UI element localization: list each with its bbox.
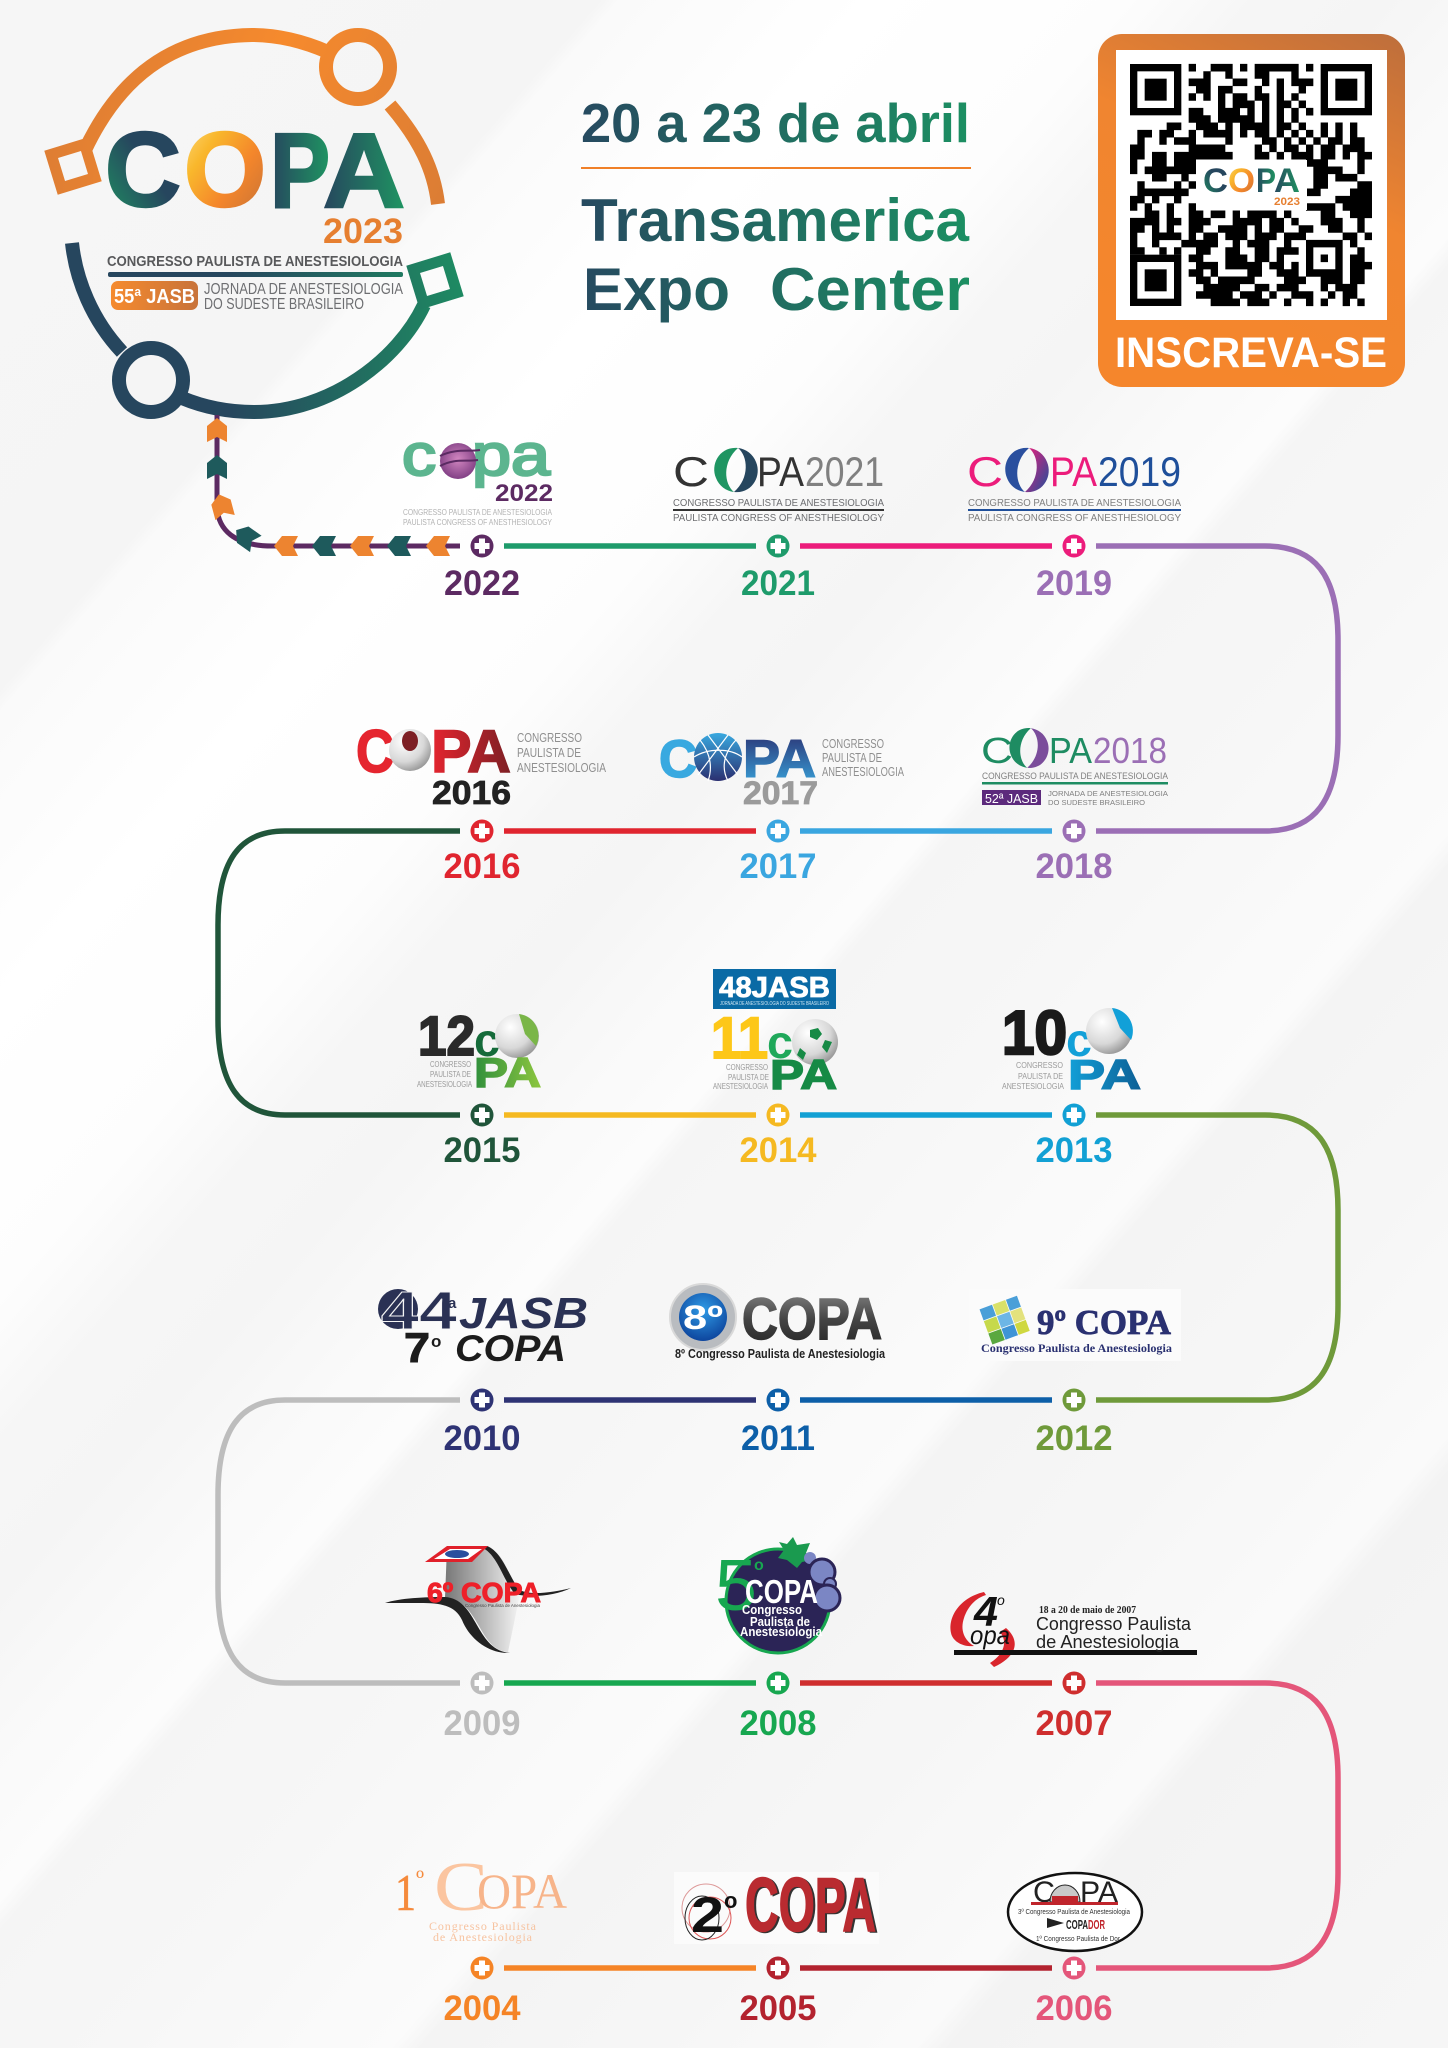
node 2007	[1062, 1672, 1086, 1694]
logo 1o COPA: C	[434, 1849, 488, 1926]
logo 3o COPA and COPADOR	[1008, 1873, 1142, 1951]
lead-in arrow path from logo to 2022	[207, 415, 460, 556]
logo 5o COPA	[715, 1537, 840, 1653]
logo 3o COPA and COPADOR: C	[1033, 1876, 1055, 1909]
main logo: COPA 2023	[51, 35, 457, 412]
QR centre logo: C	[1203, 162, 1228, 200]
year 2007: 2007	[1036, 1704, 1112, 1743]
logo 2021: PA	[757, 448, 804, 495]
wordmark COPA	[105, 111, 405, 230]
year 2011: 2011	[741, 1419, 815, 1458]
logo 2019: C	[967, 448, 1003, 495]
congress name: CONGRESSO PAULISTA DE ANESTESIOLOGIA	[107, 254, 403, 270]
logo 1o COPA: Congresso Paulista	[429, 1919, 537, 1933]
logo 8o COPA: COPA	[742, 1287, 882, 1352]
logo 2022: PAULISTA CONGRESS OF ANESTHESIOLOGY	[403, 518, 553, 527]
logo 2016: PAULISTA DE	[517, 745, 581, 760]
logo 4o copa	[950, 1588, 1197, 1667]
milestone 2019	[967, 448, 1181, 603]
year 2008: 2008	[740, 1704, 816, 1743]
logo 2016: C	[356, 718, 394, 785]
logo 2018: PA	[1049, 730, 1092, 771]
logo 2o COPA: o	[724, 1888, 737, 1913]
logo 2021: CONGRESSO PAULISTA DE ANESTESIOLOGIA	[673, 497, 884, 509]
QR centre logo: A	[1274, 162, 1300, 200]
logo 10 COPA: ANESTESIOLOGIA	[1002, 1082, 1065, 1091]
logo 1o COPA: OPA	[477, 1863, 567, 1919]
logo 44a JASB 7o COPA: JASB	[459, 1289, 588, 1338]
logo 8o COPA	[670, 1284, 886, 1361]
logo 2017: 2017	[743, 775, 818, 811]
logo 11 COPA: c	[767, 1016, 793, 1068]
bar	[108, 272, 403, 277]
node 2014	[766, 1104, 790, 1126]
logo 2021: 2021	[805, 448, 884, 495]
logo 2017: PA	[743, 730, 816, 789]
logo 2022: c	[402, 423, 436, 488]
logo 2016: 2016	[432, 774, 511, 811]
logo 12 COPA: CONGRESSO	[430, 1060, 471, 1069]
milestone 2009	[385, 1546, 571, 1743]
logo 4o copa: de Anestesiologia	[1036, 1632, 1180, 1652]
logo 2o COPA: 2	[691, 1887, 724, 1943]
milestone 2021	[673, 448, 884, 603]
JASB description: JORNADA DE ANESTESIOLOGIA	[204, 281, 404, 298]
logo 10 COPA: 10	[1002, 999, 1067, 1068]
node 2010	[470, 1388, 494, 1412]
logo 2018: DO SUDESTE BRASILEIRO	[1048, 798, 1145, 807]
year 2009: 2009	[444, 1704, 520, 1743]
logo 1o COPA: º	[416, 1865, 424, 1894]
year 2013: 2013	[1036, 1131, 1112, 1170]
year 2018: 2018	[1036, 847, 1112, 886]
logo 4o copa: opa	[970, 1620, 1010, 1650]
node 2022	[470, 534, 494, 558]
logo 10 COPA	[1002, 999, 1141, 1098]
node 2009	[470, 1672, 494, 1694]
QR centre logo: P	[1256, 162, 1276, 200]
node 2011	[766, 1388, 790, 1412]
logo 2018: JORNADA DE ANESTESIOLOGIA	[1048, 789, 1168, 798]
logo 2022: CONGRESSO PAULISTA DE ANESTESIOLOGIA	[403, 508, 553, 517]
logo 2018: 2018	[1093, 730, 1167, 771]
logo 44a JASB 7o COPA: o	[431, 1332, 441, 1351]
node 2019	[1062, 534, 1086, 558]
logo 12 COPA	[417, 1004, 541, 1096]
QR centre logo	[1197, 160, 1307, 210]
logo 2o COPA	[674, 1863, 879, 1948]
node 2016	[470, 820, 494, 842]
date divider	[581, 167, 971, 169]
logo 2016: PA	[431, 718, 511, 785]
logo 2019	[967, 448, 1181, 524]
logo 9o COPA: 9º COPA	[1037, 1303, 1172, 1342]
year 2004: 2004	[444, 1989, 521, 2028]
logo 11 COPA: PAULISTA DE	[728, 1073, 769, 1082]
wordmark COPA: O	[184, 111, 266, 229]
logo 2016	[356, 718, 606, 811]
logo 10 COPA: PAULISTA DE	[1018, 1072, 1063, 1081]
logo 3o COPA and COPADOR: 1º Congresso Paulista de Dor	[1036, 1936, 1121, 1943]
logo 2018: CONGRESSO PAULISTA DE ANESTESIOLOGIA	[982, 771, 1169, 782]
year 2017: 2017	[740, 847, 816, 886]
logo 3o COPA and COPADOR: COPA	[1066, 1917, 1088, 1932]
node 2015	[470, 1104, 494, 1126]
logo 12 COPA: c	[474, 1014, 500, 1066]
logo 2017: C	[659, 730, 697, 789]
logo 2022: 2022	[495, 480, 553, 507]
timeline connecting lines	[218, 546, 1338, 1968]
milestone 2011	[670, 1284, 886, 1458]
logo 44a JASB 7o COPA: 7	[404, 1324, 430, 1371]
node 2006	[1062, 1956, 1086, 1980]
milestone 2008	[715, 1537, 840, 1743]
milestone 2015	[417, 1004, 541, 1170]
logo 4o copa: o	[997, 1592, 1005, 1608]
node 2004	[470, 1956, 494, 1980]
QR centre logo: O	[1228, 162, 1255, 200]
logo 2017: ANESTESIOLOGIA	[822, 765, 904, 779]
logo 5o COPA: COPA	[745, 1573, 818, 1610]
event date: 20 a 23 de abril	[581, 92, 970, 154]
logo 3o COPA and COPADOR: DOR	[1088, 1917, 1105, 1932]
milestone 2010	[378, 1281, 588, 1458]
logo 44a JASB 7o COPA: 44	[381, 1281, 457, 1341]
venue name: Transamerica	[581, 187, 970, 254]
logo 6o COPA: Congresso Paulista de Anestesiologia	[465, 1603, 540, 1608]
node 2018	[1062, 820, 1086, 842]
year 2012: 2012	[1036, 1419, 1112, 1458]
logo 8o COPA: 8º Congresso Paulista de Anestesiologia	[675, 1347, 886, 1361]
logo 2021: C	[673, 448, 709, 495]
node 2005	[766, 1956, 790, 1980]
logo 8o COPA: 8º	[683, 1299, 723, 1337]
milestone 2013	[1002, 999, 1141, 1170]
milestone 2022	[402, 423, 553, 603]
milestone 2018	[981, 728, 1169, 886]
logo 44a JASB 7o COPA	[378, 1281, 588, 1371]
milestone 2007	[950, 1588, 1197, 1743]
logo 2022: pa	[472, 423, 551, 488]
logo 2021: PAULISTA CONGRESS OF ANESTHESIOLOGY	[673, 512, 884, 524]
logo 11 COPA: 11	[711, 1006, 768, 1071]
logo 1o COPA: de Anestesiologia	[433, 1930, 533, 1944]
logo 2019: CONGRESSO PAULISTA DE ANESTESIOLOGIA	[968, 497, 1181, 509]
logo 2017: PAULISTA DE	[822, 751, 882, 765]
year 2023: 2023	[323, 212, 403, 251]
venue name: Expo	[583, 256, 730, 323]
logo 2021	[673, 448, 884, 524]
node 2008	[766, 1672, 790, 1694]
year 2019: 2019	[1036, 564, 1112, 603]
logo 2018: C	[981, 730, 1013, 771]
logo 2022	[402, 423, 553, 527]
wordmark COPA: A	[323, 112, 405, 230]
QR code	[1130, 68, 1372, 302]
year 2006: 2006	[1036, 1989, 1112, 2028]
logo 5o COPA: Congresso	[742, 1602, 802, 1617]
logo 5o COPA: o	[754, 1557, 764, 1574]
logo 6o COPA: 6º COPA	[427, 1577, 541, 1608]
logo 5o COPA: 5	[715, 1546, 757, 1626]
logo 44a JASB 7o COPA: COPA	[455, 1328, 566, 1369]
milestone 2012	[969, 1289, 1181, 1458]
year 2021: 2021	[741, 564, 815, 603]
logo 2018	[981, 728, 1169, 807]
node 2013	[1062, 1104, 1086, 1126]
logo 5o COPA: Paulista de	[750, 1614, 810, 1629]
milestone 2006	[1008, 1873, 1142, 2028]
logo 12 COPA: 12	[418, 1004, 475, 1067]
logo 9o COPA	[969, 1289, 1181, 1361]
year 2022: 2022	[444, 564, 520, 603]
milestone 2005	[674, 1863, 879, 2028]
milestone 2004	[395, 1849, 567, 2028]
navy and green ring arc	[72, 243, 457, 412]
year 2016: 2016	[444, 847, 520, 886]
logo 10 COPA: PA	[1068, 1051, 1141, 1098]
logo 4o copa: 18 a 20 de maio de 2007	[1039, 1605, 1136, 1616]
call to action: INSCREVA-SE	[1115, 329, 1387, 377]
logo 48 JASB: 48JASB	[719, 972, 830, 1004]
node 2017	[766, 820, 790, 842]
JASB description: DO SUDESTE BRASILEIRO	[204, 296, 364, 313]
logo 2019: PAULISTA CONGRESS OF ANESTHESIOLOGY	[968, 512, 1181, 524]
logo 2017: CONGRESSO	[822, 737, 884, 751]
arrow markers	[207, 418, 450, 556]
year 2010: 2010	[444, 1419, 520, 1458]
milestone 2016	[356, 718, 606, 886]
logo 2018: 52ª JASB	[985, 791, 1038, 806]
logo 2019: 2019	[1098, 448, 1181, 495]
logo 10 COPA: c	[1066, 1014, 1092, 1066]
badge: 55a JASB: 55ª JASB	[114, 286, 195, 308]
wordmark COPA: C	[105, 111, 181, 229]
logo 2o COPA: COPA	[745, 1863, 876, 1948]
logo 11 COPA: ANESTESIOLOGIA	[713, 1082, 769, 1091]
logo 11 COPA	[711, 1006, 838, 1098]
logo 4o copa: Congresso Paulista	[1036, 1614, 1192, 1634]
logo 3o COPA and COPADOR: PA	[1080, 1876, 1118, 1909]
logo 1o COPA: 1	[395, 1865, 416, 1922]
logo 6o COPA	[385, 1546, 571, 1653]
node 2021	[766, 534, 790, 558]
logo 3o COPA and COPADOR: 3º Congresso Paulista de Anestesiologia	[1018, 1909, 1130, 1916]
milestone 2014	[711, 969, 838, 1170]
QR centre logo: 2023	[1274, 196, 1300, 208]
orange ring arc	[51, 35, 438, 204]
logo 9o COPA: Congresso Paulista de Anestesiologia	[981, 1341, 1172, 1355]
venue name: Center	[770, 256, 970, 323]
logo 10 COPA: CONGRESSO	[1016, 1061, 1063, 1070]
year 2015: 2015	[444, 1131, 520, 1170]
logo 4o copa: 4	[973, 1588, 998, 1635]
JASB description	[204, 281, 404, 313]
logo 2016: ANESTESIOLOGIA	[517, 760, 606, 775]
milestone 2017	[659, 730, 904, 886]
logo 2017	[659, 730, 904, 811]
logo 48 JASB: JORNADA DE ANESTESIOLOGIA DO SUDESTE BRASILEIRO	[720, 1001, 829, 1007]
logo 12 COPA: PA	[474, 1049, 541, 1096]
logo 1o COPA	[395, 1849, 567, 1944]
wordmark COPA: P	[270, 112, 330, 230]
logo 12 COPA: PAULISTA DE	[430, 1070, 471, 1079]
venue name	[581, 187, 970, 323]
logo 11 COPA: CONGRESSO	[726, 1063, 768, 1072]
logo 5o COPA: Anestesiologia	[740, 1624, 823, 1639]
logo 11 COPA: PA	[770, 1051, 837, 1098]
node 2012	[1062, 1388, 1086, 1412]
logo 12 COPA: ANESTESIOLOGIA	[417, 1080, 473, 1089]
logo 2016: CONGRESSO	[517, 730, 582, 745]
logo 2019: PA	[1050, 448, 1097, 495]
year 2005: 2005	[740, 1989, 816, 2028]
QR registration card	[1098, 34, 1405, 387]
year 2014: 2014	[740, 1131, 817, 1170]
logo 44a JASB 7o COPA: a	[448, 1295, 457, 1312]
